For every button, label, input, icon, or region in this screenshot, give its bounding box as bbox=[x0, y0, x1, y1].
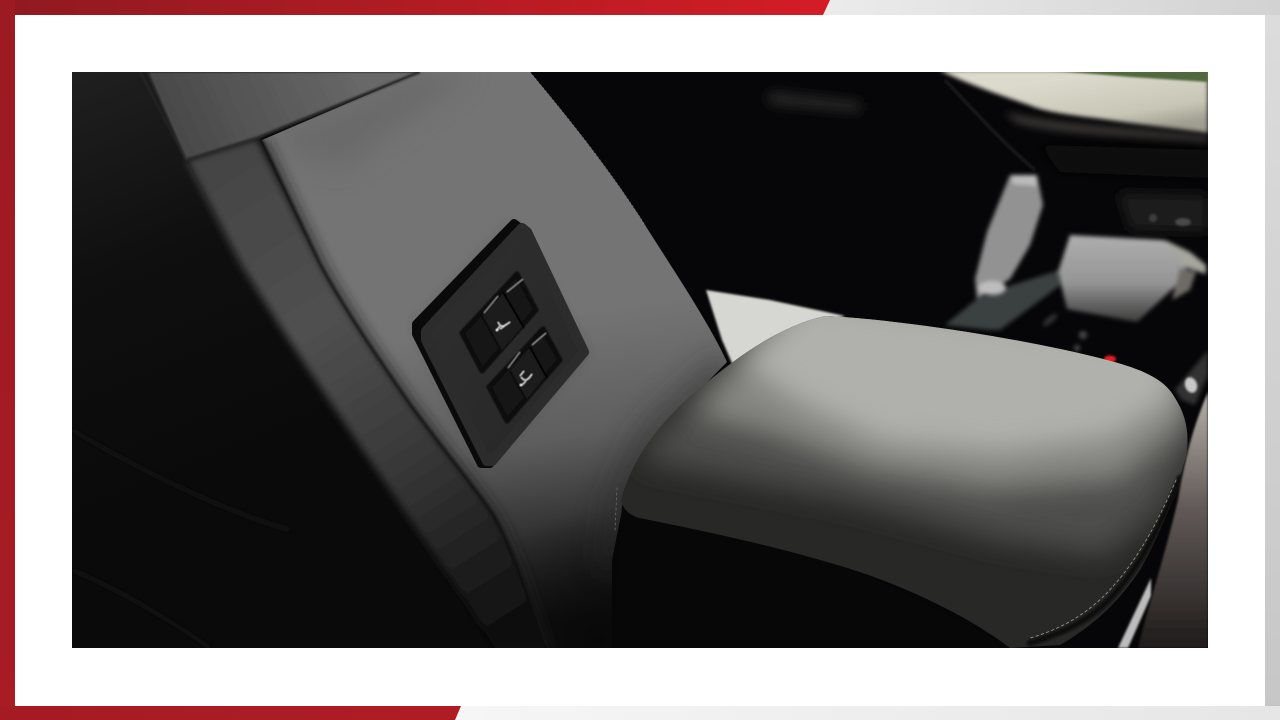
white sliver beside armrest bbox=[1118, 578, 1151, 648]
silver lever bbox=[975, 175, 1043, 299]
panel edge stitching bbox=[530, 72, 645, 225]
armrest mid tone bbox=[640, 300, 1200, 555]
frame: left bar bbox=[0, 0, 15, 720]
dark cavity under armrest bbox=[622, 505, 623, 512]
dark left side of seat bbox=[72, 72, 237, 334]
seam line bbox=[262, 140, 548, 648]
right foreground seat bbox=[1138, 392, 1208, 648]
white console behind armrest bbox=[706, 290, 845, 370]
main seat back panel bbox=[262, 72, 727, 648]
console trim strip bbox=[945, 270, 1062, 330]
white reflector bbox=[1183, 375, 1199, 395]
top shading bbox=[302, 88, 422, 155]
gear selector knob bbox=[1058, 235, 1206, 322]
armrest base tone bbox=[610, 300, 1200, 650]
panel face bbox=[426, 228, 584, 461]
photo background bbox=[72, 72, 1208, 648]
armrest bbox=[621, 316, 1188, 648]
panel dark rim bbox=[416, 223, 526, 464]
dashboard trim bbox=[939, 70, 1208, 170]
seat edge seam bbox=[157, 106, 180, 148]
lower button bbox=[489, 329, 560, 421]
armrest soft light bbox=[695, 300, 1190, 490]
upper button bbox=[462, 274, 536, 371]
upper seat panel bbox=[148, 72, 420, 160]
top seam line bbox=[186, 72, 420, 160]
frame: top bar bbox=[0, 0, 1280, 15]
red indicator light bbox=[1104, 356, 1116, 362]
buttons on console panel bbox=[1149, 214, 1191, 226]
panel shadow on leather bbox=[576, 359, 585, 369]
armrest highlight bbox=[745, 295, 1175, 452]
frame: right bar bbox=[1265, 15, 1280, 720]
side bolster bbox=[186, 138, 548, 648]
lower shadow bbox=[534, 550, 612, 648]
control panel bbox=[416, 223, 586, 464]
seat lower crease lines bbox=[72, 430, 290, 648]
console lower controls bbox=[1041, 312, 1208, 405]
dark cabin door detail bbox=[767, 92, 1208, 232]
frame: bottom bar bbox=[0, 706, 1280, 720]
photo: car seat and centre console bbox=[72, 70, 1208, 650]
armrest stitching bbox=[615, 478, 1180, 643]
seam shadow bbox=[262, 136, 511, 536]
shadow by armrest bbox=[612, 355, 726, 498]
